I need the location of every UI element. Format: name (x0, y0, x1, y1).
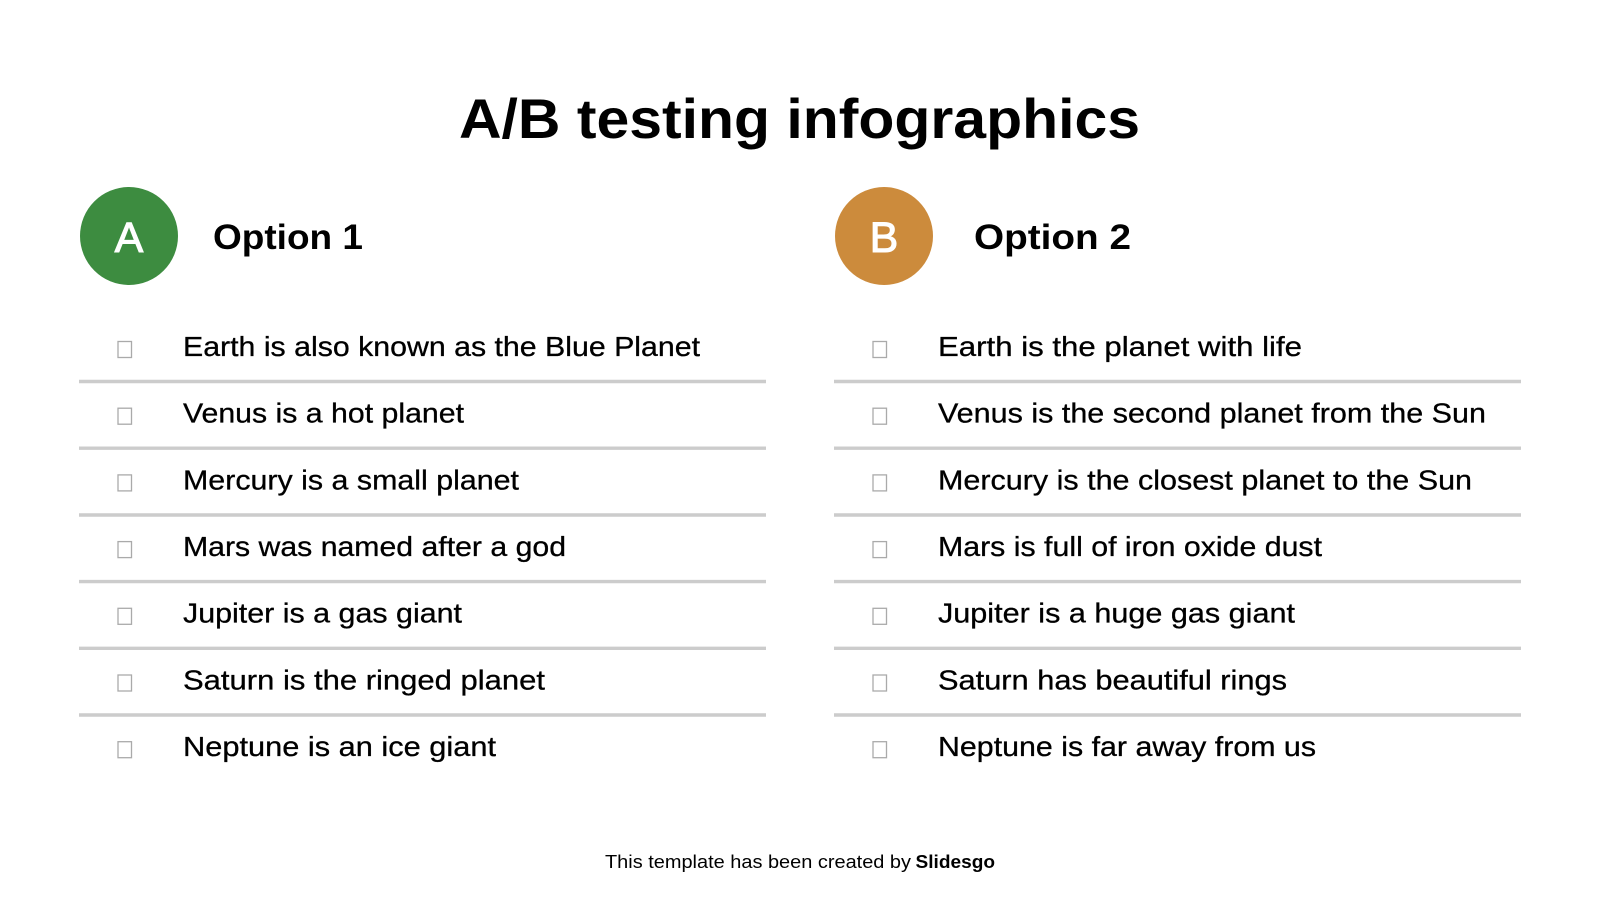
icon: badge A (80, 187, 178, 285)
list item: Venus: Venus is a hot planet (183, 398, 464, 429)
list item: Neptune: Neptune is far away from us (938, 731, 1316, 762)
list item: Earth: Earth is also known as the Blue Planet (183, 331, 700, 362)
list item: Earth: Earth is the planet with life (938, 331, 1302, 362)
icon: badge B: B (870, 214, 898, 262)
icon: badge A: A (115, 214, 144, 262)
footer credit: This template has been created by (605, 852, 911, 872)
list item: Mars: Mars is full of iron oxide dust (938, 531, 1322, 562)
list item: Mars: Mars was named after a god (183, 531, 566, 562)
list item: Mercury: Mercury is the closest planet to the Sun (938, 464, 1472, 495)
panel: option 2 (834, 187, 1521, 762)
list item: Saturn: Saturn is the ringed planet (183, 664, 545, 696)
list item: Jupiter: Jupiter is a gas giant (183, 597, 462, 628)
list item: Mercury: Mercury is a small planet (183, 464, 519, 495)
footer credit: Slidesgo (916, 852, 995, 872)
heading: option 2: Option 2 (974, 218, 1131, 257)
list item: Saturn: Saturn has beautiful rings (938, 664, 1287, 696)
panel: option 1 (79, 187, 766, 762)
list item: Venus: Venus is the second planet from the Sun (938, 398, 1486, 429)
title: A/B testing infographics (459, 87, 1140, 150)
list item: Jupiter: Jupiter is a huge gas giant (938, 597, 1295, 628)
list item: Neptune: Neptune is an ice giant (183, 731, 496, 762)
heading: option 1: Option 1 (213, 218, 363, 257)
icon: badge B (835, 187, 933, 285)
